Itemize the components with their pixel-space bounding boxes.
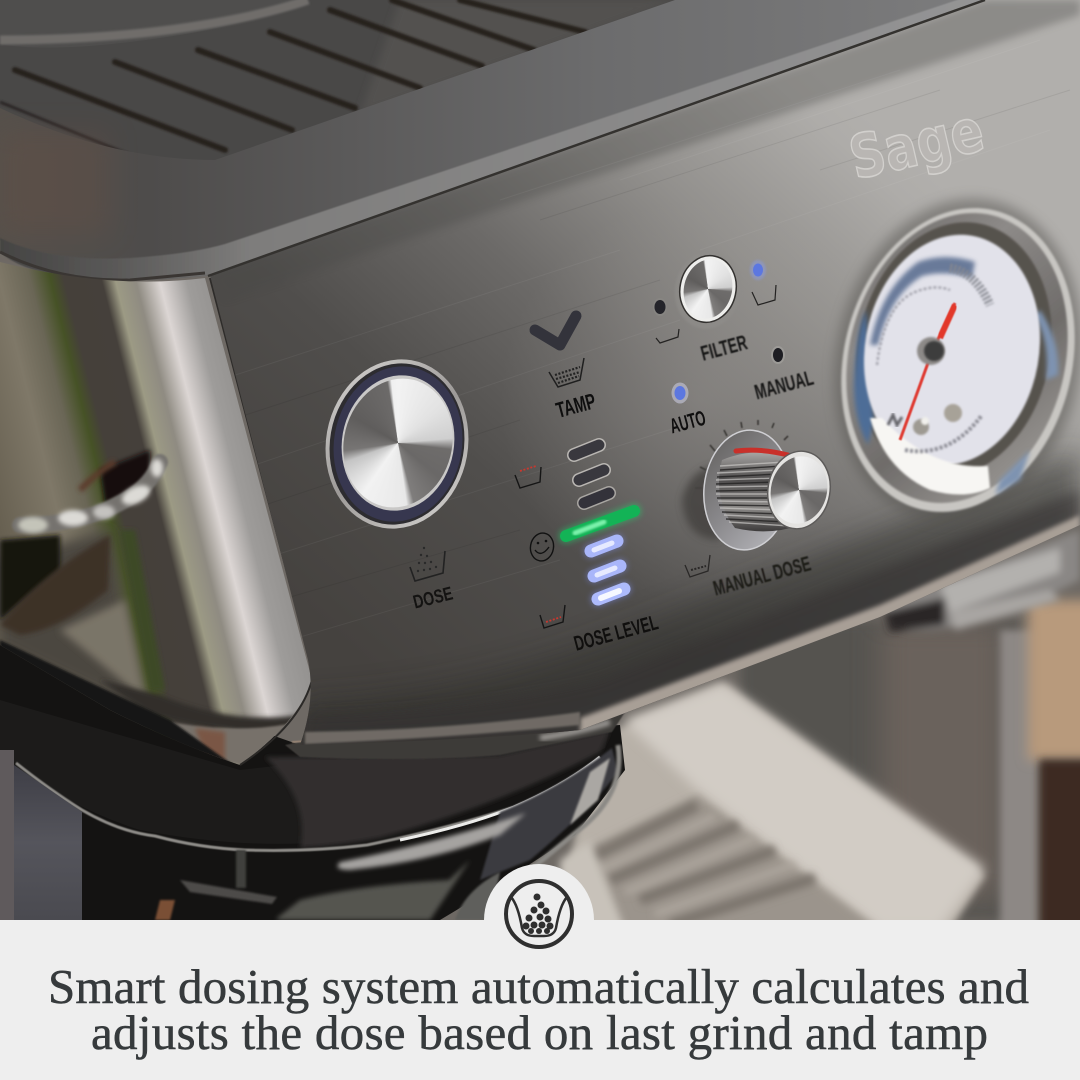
gauge fine print <box>877 287 950 365</box>
label: dose level: DOSE LEVEL <box>572 611 661 656</box>
gauge blue reflections <box>854 310 874 445</box>
gauge blue arc <box>870 257 975 345</box>
indicator: high cup <box>515 467 541 488</box>
dose label and icon: DOSE <box>411 583 455 614</box>
dial ribbed body <box>719 452 800 531</box>
dose button <box>312 348 482 540</box>
indicator: unlit bars <box>574 445 609 503</box>
chrome ring highlight <box>16 757 600 850</box>
panel lower edge band <box>285 712 625 759</box>
right column and wall <box>1000 630 1038 930</box>
filter indicators and label <box>653 260 776 366</box>
dial scale ticks <box>695 420 788 513</box>
indicator: green bar <box>566 511 634 536</box>
filter indicators and label: FILTER <box>698 331 750 366</box>
main stainless panel <box>200 0 1080 760</box>
portafilter <box>0 640 625 920</box>
dial bezel <box>698 426 796 554</box>
lower edge shading <box>290 450 1080 755</box>
side catch <box>0 450 163 635</box>
indicator: smiley <box>528 531 556 563</box>
pressure gauge <box>805 175 1080 545</box>
bottom shadow of corner <box>100 680 300 735</box>
felt ring <box>265 730 610 848</box>
gauge screws <box>913 419 929 435</box>
mode indicators: auto and manual <box>668 346 816 438</box>
top rim of the machine <box>0 0 985 280</box>
left post <box>14 765 82 920</box>
dose label and icon <box>410 547 455 614</box>
manual dose dial <box>682 420 836 554</box>
background scene <box>0 240 1080 920</box>
dose button metal disc <box>330 367 466 519</box>
filter button <box>668 245 748 335</box>
dial red pointer <box>736 450 788 455</box>
caption text: adjusts the dose based on last grind and tamp <box>91 1005 988 1060</box>
rim lip highlight <box>0 0 985 280</box>
caption text: Smart dosing system automatically calculates and <box>48 959 1029 1014</box>
gauge hub <box>917 337 945 365</box>
filter button metal disc <box>677 254 739 324</box>
gauge inner rim shadow <box>833 204 1075 496</box>
tamp icon and label: TAMP <box>553 388 598 423</box>
lower reflections <box>180 880 277 904</box>
silver side corner <box>0 262 318 770</box>
gauge needle <box>900 303 955 440</box>
chrome reflection under the panel <box>885 530 1080 632</box>
bevel highlight <box>580 515 1080 735</box>
chrome band below ring <box>480 748 618 880</box>
drip tray rounded edge <box>0 0 308 48</box>
manual dose label <box>685 552 813 601</box>
dial cap metal disc <box>764 450 834 530</box>
indicator: blue bars <box>591 541 624 599</box>
tamp check mark <box>535 316 576 345</box>
icon: coffee grounds <box>522 894 554 934</box>
icon: basket <box>511 897 567 936</box>
logo: Sage: Sage <box>843 95 990 194</box>
dose level indicators <box>515 445 661 656</box>
gauge dial face <box>846 221 1058 479</box>
blurred drip tray <box>560 683 985 930</box>
tamp icon and label <box>549 358 598 423</box>
manual dose label: MANUAL DOSE <box>711 552 813 601</box>
gauge bright rim <box>870 418 990 495</box>
drip tray grate <box>0 0 680 170</box>
caption text <box>48 959 1029 1060</box>
mode indicators: auto and manual: AUTO <box>668 407 708 438</box>
dark collar <box>0 700 610 844</box>
icon: dosing basket badge <box>484 864 594 947</box>
mode indicators: auto and manual: MANUAL <box>752 367 816 404</box>
caption background <box>0 920 1080 1080</box>
indicator: low cup <box>540 605 565 628</box>
